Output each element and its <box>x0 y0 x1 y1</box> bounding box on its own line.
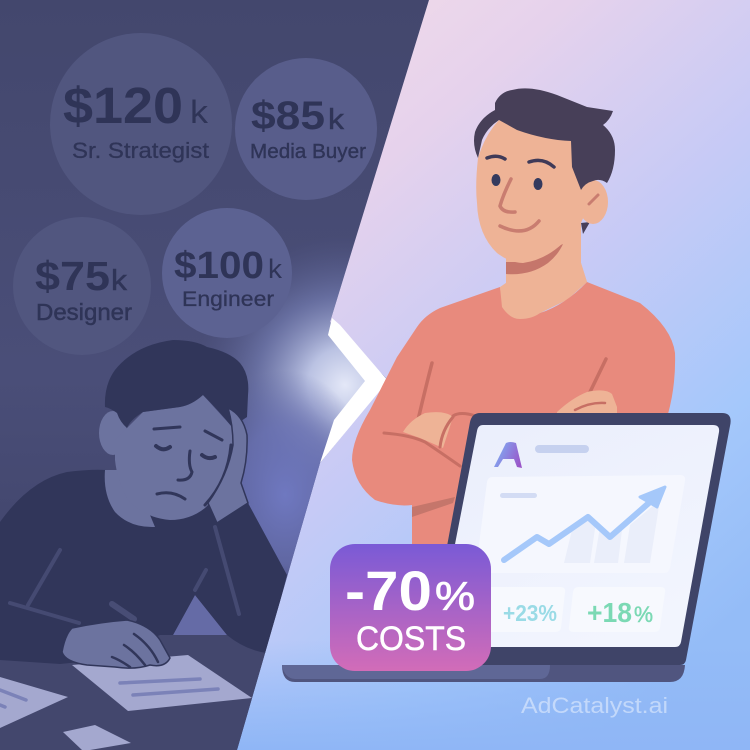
left forearm hand <box>403 412 453 448</box>
bubble: media buyer: Media Buyer <box>250 141 366 163</box>
stat card +18%: % <box>634 602 653 627</box>
chart card <box>476 475 685 573</box>
dark sweater body <box>0 470 287 664</box>
ear <box>99 411 127 455</box>
ear <box>578 180 608 224</box>
smile <box>500 221 539 231</box>
stat card +18% <box>569 587 665 632</box>
coral sweater <box>352 282 675 560</box>
bubble: designer <box>13 217 151 355</box>
pen <box>112 604 134 619</box>
laptop <box>282 413 731 682</box>
chart bars <box>564 500 660 563</box>
sad face <box>115 395 236 520</box>
white chevron divider <box>320 318 388 463</box>
bubble: designer: $75 <box>35 253 110 299</box>
laptop base highlight <box>282 665 550 679</box>
right hand on arm <box>557 390 617 416</box>
table <box>0 652 266 750</box>
badge: -70% costs <box>330 544 491 671</box>
bubble: senior strategist: $120 <box>63 77 183 134</box>
bubble: designer: Designer <box>36 299 132 325</box>
stat card +23% <box>480 587 565 632</box>
confident person <box>352 88 675 560</box>
eyes <box>492 174 500 186</box>
bubble: engineer <box>162 208 292 338</box>
bubble: senior strategist <box>50 33 232 215</box>
writing hand <box>62 620 170 668</box>
salary bubbles <box>13 33 377 355</box>
neck opening <box>500 263 587 319</box>
stat card +23%: +23% <box>503 600 557 626</box>
left panel: dark background with glow <box>0 0 450 750</box>
gap under arm <box>173 595 227 635</box>
badge: -70% costs: % <box>435 575 475 619</box>
bubble: designer: k <box>111 265 128 297</box>
hair <box>474 88 615 190</box>
bubble: engineer: $100 <box>174 245 264 287</box>
under-arm shadow <box>412 497 455 517</box>
bubble: senior strategist: k <box>190 94 209 130</box>
badge: -70% costs: COSTS <box>356 620 466 658</box>
nose <box>500 179 515 212</box>
arm crease lines <box>384 414 476 466</box>
laptop frame <box>425 413 731 665</box>
main paper <box>72 655 252 711</box>
neck <box>500 215 587 319</box>
sleeve fold lines <box>418 359 606 420</box>
face details: brows, eyes, nose, mouth <box>154 427 231 505</box>
hand on cheek <box>208 408 248 523</box>
bubble: media buyer: $85 <box>251 94 325 138</box>
arrow head <box>640 487 665 507</box>
bubble: senior strategist: Sr. Strategist <box>72 138 209 163</box>
brows <box>487 156 554 167</box>
face <box>476 120 595 263</box>
bubble: media buyer: k <box>328 104 345 136</box>
badge: -70% costs: -70 <box>345 559 432 622</box>
sweater fold lines <box>10 527 239 623</box>
bubble: engineer: k <box>268 254 283 284</box>
screen logo <box>494 442 522 468</box>
brand watermark: AdCatalyst.ai <box>521 693 668 718</box>
laptop base <box>282 665 685 682</box>
growth line <box>504 502 650 560</box>
bubble: engineer: Engineer <box>182 288 274 311</box>
chin shadow <box>506 244 563 274</box>
bubble: media buyer <box>235 58 377 200</box>
neck <box>105 470 155 527</box>
stat card +18%: +18 <box>587 597 632 628</box>
bottom paper <box>63 725 131 750</box>
hair <box>105 340 248 428</box>
hair back <box>581 222 590 234</box>
laptop screen <box>435 425 719 647</box>
header bar <box>535 445 589 453</box>
left paper <box>0 677 68 728</box>
stressed person at desk <box>0 340 287 750</box>
